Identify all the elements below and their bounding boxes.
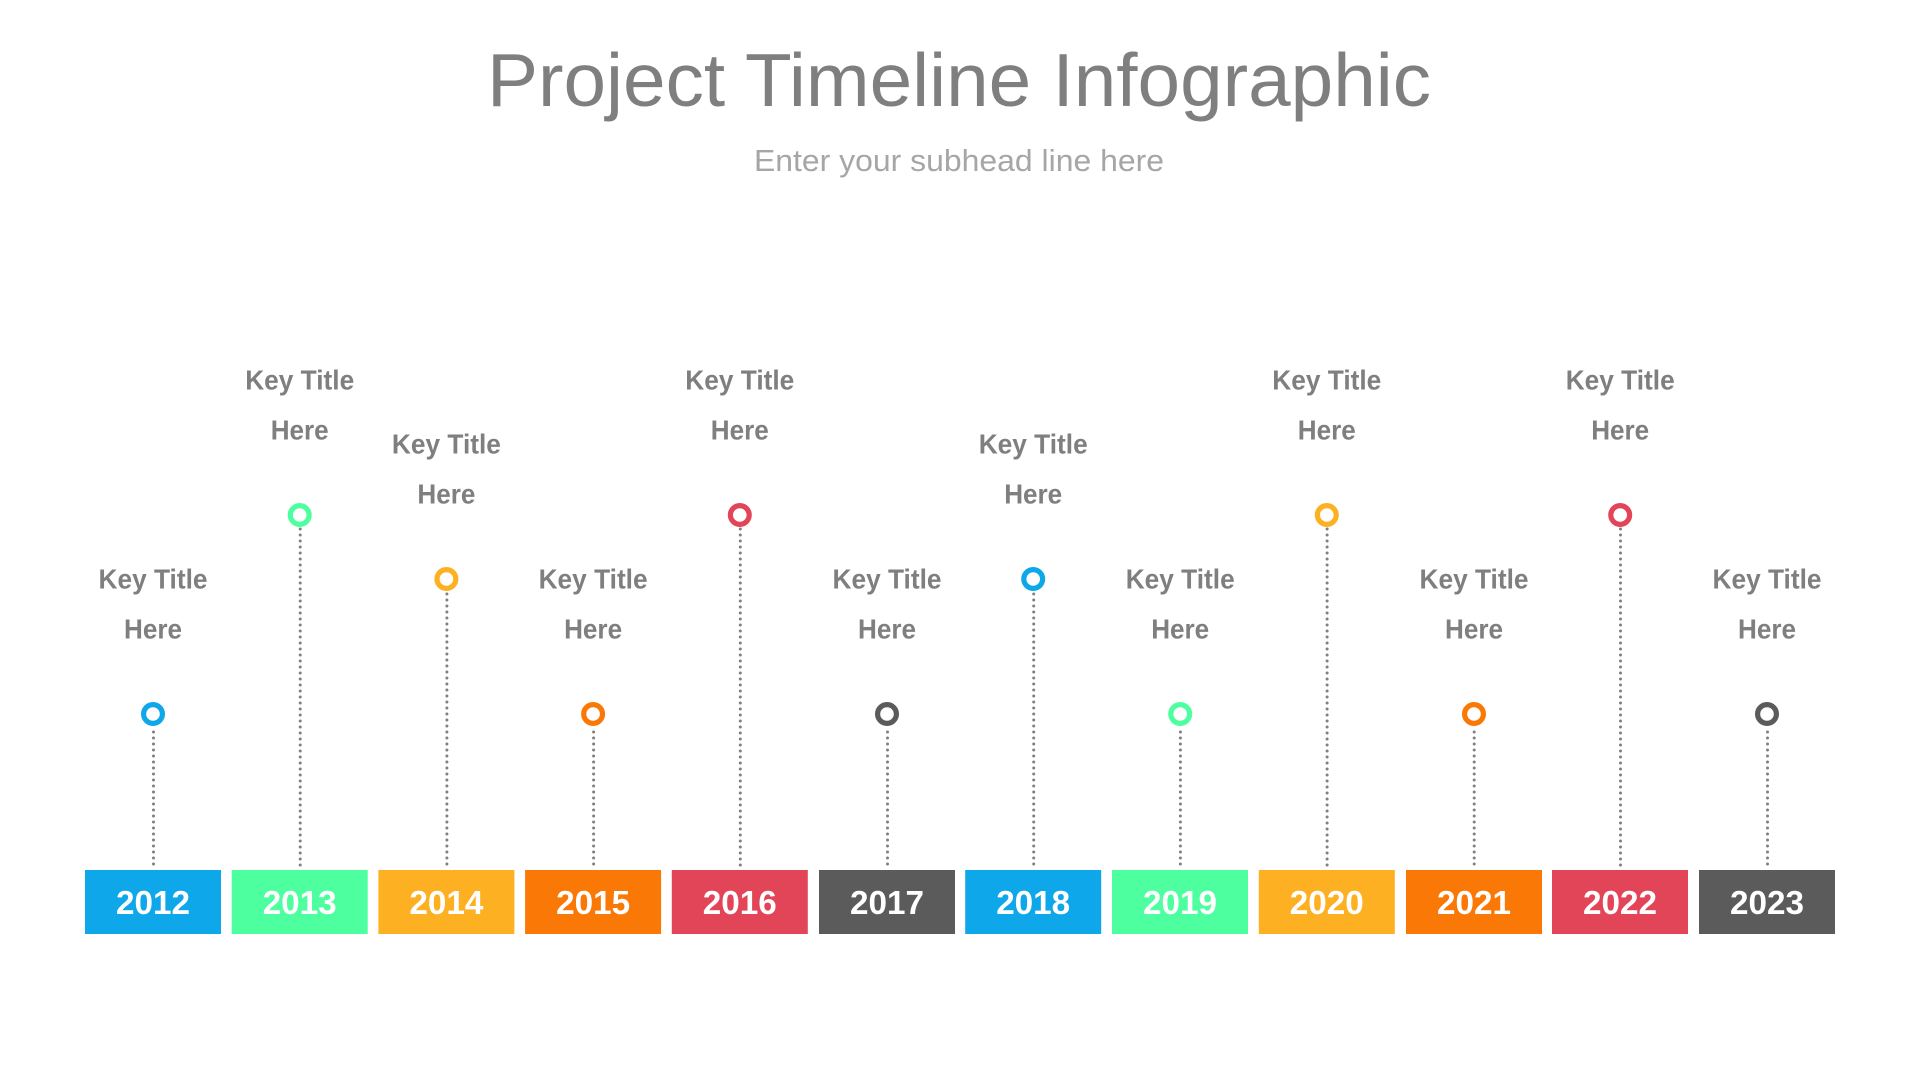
year box 2013	[232, 870, 368, 934]
dotted stem 2018	[1032, 594, 1035, 870]
milestone 2018	[965, 428, 1101, 934]
milestone 2020	[1259, 364, 1395, 934]
milestone 2019	[1112, 564, 1248, 934]
label 2013: Here	[271, 414, 329, 446]
dotted stem 2013	[299, 529, 302, 870]
milestone 2016	[672, 364, 808, 934]
milestone 2015	[525, 564, 661, 934]
marker 2014	[437, 570, 456, 588]
label 2021	[1420, 564, 1528, 644]
dotted stem 2017	[886, 732, 889, 870]
year box 2021: 2021	[1437, 885, 1511, 922]
label 2022	[1566, 364, 1675, 446]
label 2023: Key Title	[1712, 564, 1822, 594]
label 2016: Key Title	[685, 364, 794, 396]
label 2018: Here	[1004, 478, 1062, 510]
label 2021: Key Title	[1420, 564, 1528, 594]
marker 2020	[1317, 506, 1336, 524]
dotted stem 2014	[445, 594, 448, 870]
dotted stem 2012	[152, 732, 155, 870]
year box 2020: 2020	[1290, 885, 1364, 922]
marker 2021	[1465, 705, 1483, 723]
label 2017: Key Title	[832, 564, 942, 594]
dotted stem 2015	[592, 732, 595, 870]
year box 2017: 2017	[850, 885, 924, 922]
marker 2017	[878, 705, 896, 723]
label 2016: Here	[711, 414, 769, 446]
label 2020: Here	[1298, 414, 1356, 446]
marker 2016	[730, 506, 749, 524]
year box 2019	[1112, 870, 1248, 934]
marker 2015	[584, 705, 602, 723]
label 2014: Here	[417, 478, 475, 510]
milestone 2021	[1406, 564, 1542, 934]
year box 2012: 2012	[116, 885, 190, 922]
label 2023	[1712, 564, 1822, 644]
milestone 2013	[232, 364, 368, 934]
label 2012: Here	[124, 614, 182, 644]
year box 2014	[378, 870, 514, 934]
year box 2018: 2018	[996, 885, 1070, 922]
label 2015: Here	[564, 614, 622, 644]
label 2013: Key Title	[245, 364, 354, 396]
label 2021: Here	[1445, 614, 1503, 644]
year box 2015	[525, 870, 661, 934]
marker 2013	[290, 506, 309, 524]
label 2013	[245, 364, 354, 446]
year box 2018	[965, 870, 1101, 934]
dotted stem 2019	[1179, 732, 1182, 870]
marker 2018	[1024, 570, 1043, 588]
dotted stem 2022	[1619, 529, 1622, 870]
subtitle: Enter your subhead line here	[754, 143, 1164, 178]
marker 2019	[1171, 705, 1190, 723]
label 2019	[1126, 564, 1235, 644]
label 2017	[832, 564, 942, 644]
marker 2023	[1758, 705, 1776, 723]
label 2022: Here	[1591, 414, 1649, 446]
label 2019: Key Title	[1126, 564, 1235, 594]
year box 2013: 2013	[263, 885, 337, 922]
label 2017: Here	[858, 614, 916, 644]
label 2022: Key Title	[1566, 364, 1675, 396]
dotted stem 2021	[1473, 732, 1476, 870]
year box 2016: 2016	[703, 885, 777, 922]
year box 2012	[85, 870, 221, 934]
milestone 2023	[1699, 564, 1835, 934]
label 2016	[685, 364, 794, 446]
label 2018	[979, 428, 1088, 510]
marker 2022	[1611, 506, 1630, 524]
label 2012: Key Title	[98, 564, 208, 594]
label 2015	[539, 564, 648, 644]
label 2015: Key Title	[539, 564, 648, 594]
milestone 2017	[819, 564, 955, 934]
year box 2022: 2022	[1583, 885, 1657, 922]
label 2014: Key Title	[392, 428, 501, 460]
year box 2023	[1699, 870, 1835, 934]
year box 2019: 2019	[1143, 885, 1217, 922]
year box 2023: 2023	[1730, 885, 1804, 922]
milestone 2022	[1552, 364, 1688, 934]
year box 2021	[1406, 870, 1542, 934]
label 2020: Key Title	[1272, 364, 1381, 396]
label 2018: Key Title	[979, 428, 1088, 460]
dotted stem 2016	[739, 529, 742, 870]
dotted stem 2023	[1766, 732, 1769, 870]
title: Project Timeline Infographic	[487, 38, 1431, 122]
label 2020	[1272, 364, 1381, 446]
milestone 2012	[85, 564, 221, 934]
marker 2012	[144, 705, 162, 723]
year box 2020	[1259, 870, 1395, 934]
label 2012	[98, 564, 208, 644]
year box 2015: 2015	[556, 885, 630, 922]
label 2023: Here	[1738, 614, 1796, 644]
label 2019: Here	[1151, 614, 1209, 644]
dotted stem 2020	[1326, 529, 1329, 870]
year box 2014: 2014	[409, 885, 484, 922]
year box 2017	[819, 870, 955, 934]
year box 2016	[672, 870, 808, 934]
milestone 2014	[378, 428, 514, 934]
year box 2022	[1552, 870, 1688, 934]
label 2014	[392, 428, 501, 510]
